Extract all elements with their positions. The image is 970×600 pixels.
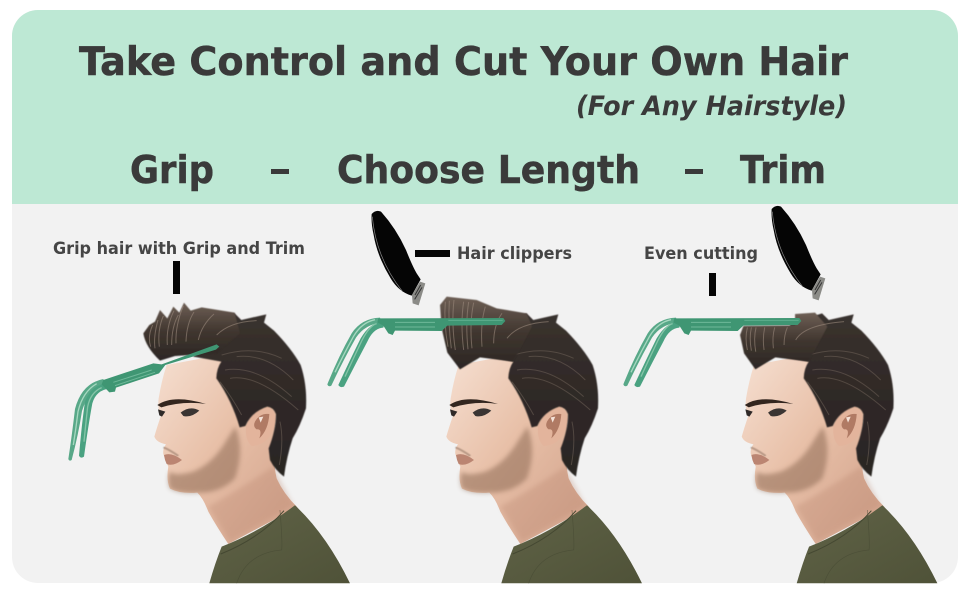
step heading: Trim: Trim [740, 148, 826, 192]
figure: man with tall hair (step 2) [440, 297, 642, 583]
subtitle: (For Any Hairstyle) [576, 91, 847, 122]
pointer line: hair clippers [415, 250, 450, 257]
step heading: Choose Length: Choose Length [337, 148, 640, 192]
icon: green grip tool trimming [623, 318, 801, 387]
icon: hair clippers [372, 211, 425, 305]
separator dash [685, 169, 703, 174]
separator dash [271, 169, 289, 174]
icon: green grip tool level [327, 318, 505, 387]
figure: man with trimmed hair (step 3) [740, 313, 937, 583]
label: even cutting: Even cutting [644, 244, 758, 264]
pointer line: grip hair [173, 261, 180, 294]
step heading: Grip: Grip [130, 148, 214, 192]
icon: green grip tool angled [68, 344, 219, 461]
figure: man with swept-up hair (step 1) [143, 303, 350, 583]
title: Take Control and Cut Your Own Hair [79, 40, 849, 85]
pointer line: even cutting [709, 273, 716, 296]
icon: hair clippers trimming [772, 206, 825, 300]
label: grip hair: Grip hair with Grip and Trim [53, 239, 305, 259]
label: hair clippers: Hair clippers [457, 244, 572, 264]
